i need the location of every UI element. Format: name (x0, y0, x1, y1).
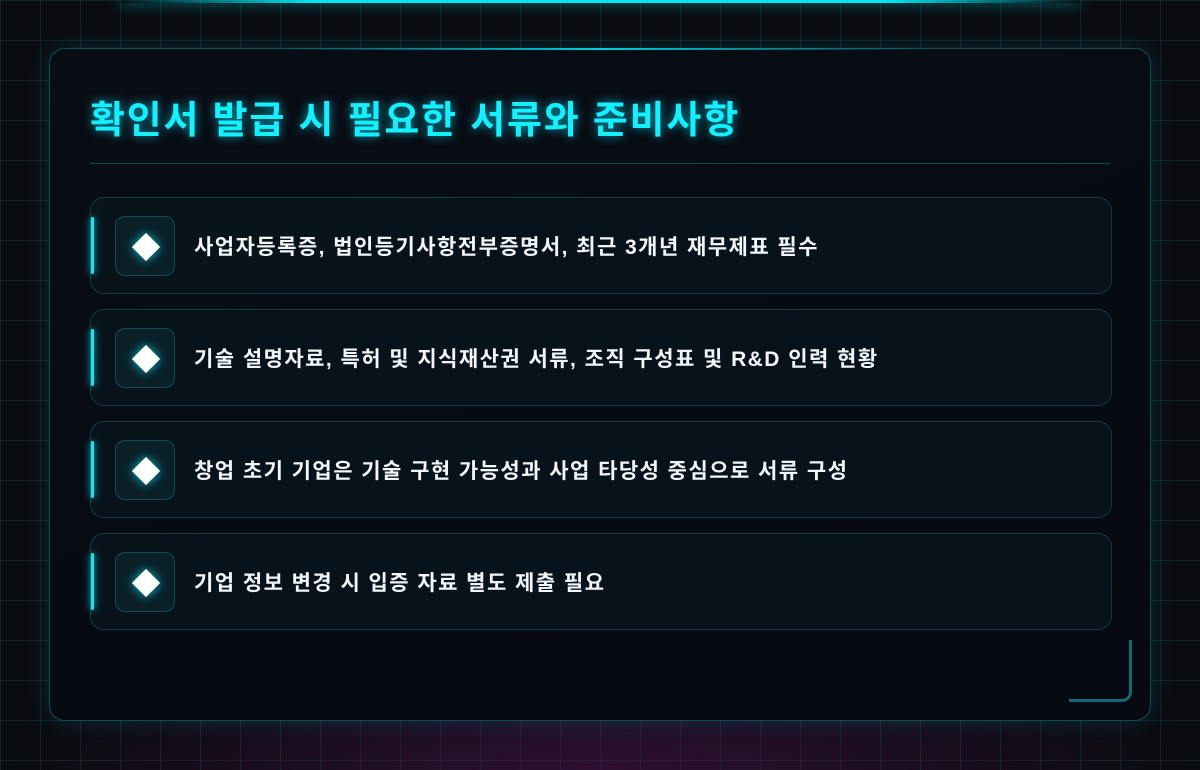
corner bracket (1069, 640, 1132, 702)
item 4 (90, 533, 1112, 630)
text 2: 기술 설명자료, 특허 및 지식재산권 서류, 조직 구성표 및 R&D 인력 현황 (194, 348, 879, 371)
item 1 (90, 197, 1112, 294)
text 4: 기업 정보 변경 시 입증 자료 별도 제출 필요 (194, 572, 605, 595)
item 2 (90, 309, 1112, 406)
icon: diamond (115, 552, 175, 612)
text 1: 사업자등록증, 법인등기사항전부증명서, 최근 3개년 재무제표 필수 (194, 236, 819, 259)
text 3: 창업 초기 기업은 기술 구현 가능성과 사업 타당성 중심으로 서류 구성 (194, 460, 848, 483)
icon: diamond (115, 216, 175, 276)
title: 확인서 발급 시 필요한 서류와 준비사항 (90, 100, 740, 142)
icon: diamond (115, 440, 175, 500)
item 3 (90, 421, 1112, 518)
icon: diamond (115, 328, 175, 388)
